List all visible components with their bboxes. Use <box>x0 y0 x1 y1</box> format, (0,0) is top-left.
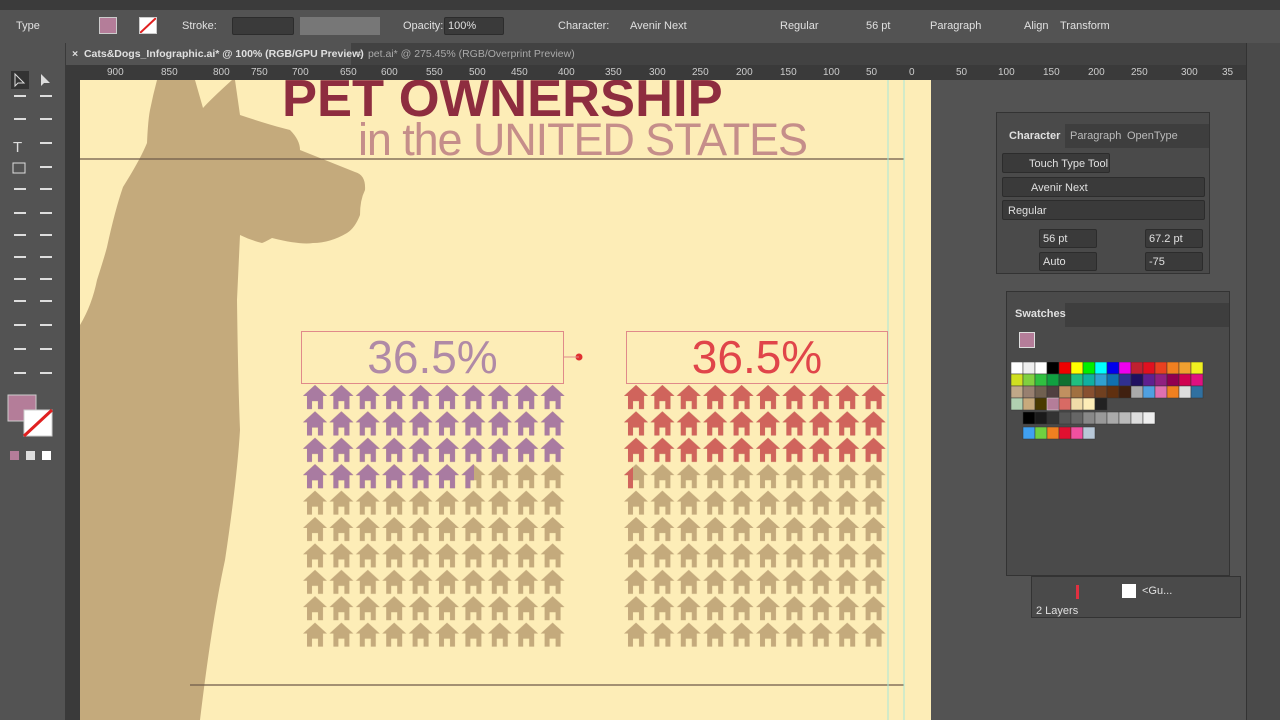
swatches panel <box>1006 291 1230 576</box>
control bar: Stroke: <box>182 20 217 32</box>
subtitle: in the UNITED STATES <box>358 114 807 165</box>
rulers: 100 <box>823 67 840 78</box>
rulers: 850 <box>161 67 178 78</box>
character panel: Touch Type Tool <box>1029 158 1108 170</box>
left stat: percent: 36.5% <box>367 331 498 383</box>
control bar: Paragraph <box>930 20 981 32</box>
document tabs: × Cats&Dogs_Infographic.ai* @ 100% (RGB/GPU Preview) <box>72 48 364 60</box>
rulers: 35 <box>1222 67 1233 78</box>
rulers: 150 <box>780 67 797 78</box>
right stat: percent <box>626 331 888 384</box>
left stat: house grid <box>303 354 582 647</box>
rulers: 750 <box>251 67 268 78</box>
character panel: 56 pt <box>1043 233 1067 245</box>
character panel: OpenType <box>1127 130 1178 142</box>
rulers: 250 <box>692 67 709 78</box>
rulers: 300 <box>1181 67 1198 78</box>
character panel: Regular <box>1008 205 1047 217</box>
rulers: 50 <box>956 67 967 78</box>
rulers: 100 <box>998 67 1015 78</box>
guides <box>887 80 889 720</box>
document tabs <box>66 43 1280 65</box>
document tabs: × pet.ai* @ 275.45% (RGB/Overprint Preview) <box>356 48 575 60</box>
left stat: percent <box>301 331 564 384</box>
horizontal rules <box>80 158 904 160</box>
rulers: 650 <box>340 67 357 78</box>
character panel: -75 <box>1149 256 1165 268</box>
rulers: 700 <box>292 67 309 78</box>
layers panel: 2 Layers <box>1036 605 1078 617</box>
rulers: 350 <box>605 67 622 78</box>
character panel <box>996 112 1210 274</box>
character panel: Paragraph <box>1070 130 1121 142</box>
dog silhouette <box>80 80 365 720</box>
control bar: Type <box>16 20 40 32</box>
right icon bar <box>1246 43 1280 720</box>
layers panel <box>1031 576 1241 618</box>
rulers: 800 <box>213 67 230 78</box>
rulers: 600 <box>381 67 398 78</box>
rulers <box>66 65 1280 80</box>
control bar: Opacity: <box>403 20 443 32</box>
rulers: 900 <box>107 67 124 78</box>
character panel: Auto <box>1043 256 1066 268</box>
left toolbox: T <box>13 139 22 156</box>
rulers: 300 <box>649 67 666 78</box>
left toolbox <box>0 43 66 720</box>
rulers: 200 <box>736 67 753 78</box>
rulers: 150 <box>1043 67 1060 78</box>
control bar: Regular <box>780 20 819 32</box>
rulers: 500 <box>469 67 486 78</box>
control bar: 56 pt <box>866 20 890 32</box>
control bar: Character: <box>558 20 609 32</box>
right stat: house grid <box>624 385 886 647</box>
rulers: 550 <box>426 67 443 78</box>
layers panel: <Gu... <box>1142 585 1172 597</box>
top system bar <box>0 0 1280 10</box>
control bar: Avenir Next <box>630 20 687 32</box>
control bar: Transform <box>1060 20 1110 32</box>
rulers: 200 <box>1088 67 1105 78</box>
character panel: Avenir Next <box>1031 182 1088 194</box>
character panel: 67.2 pt <box>1149 233 1183 245</box>
swatches panel: Swatches <box>1015 308 1066 320</box>
rulers: 250 <box>1131 67 1148 78</box>
rulers: 450 <box>511 67 528 78</box>
artboard <box>80 80 931 720</box>
control bar: 100% <box>448 20 476 32</box>
control bar <box>0 10 1280 42</box>
rulers: 50 <box>866 67 877 78</box>
rulers: 400 <box>558 67 575 78</box>
rulers: 0 <box>909 67 915 78</box>
right stat: percent: 36.5% <box>692 331 822 383</box>
control bar: Align <box>1024 20 1048 32</box>
character panel: Character <box>1009 130 1060 142</box>
